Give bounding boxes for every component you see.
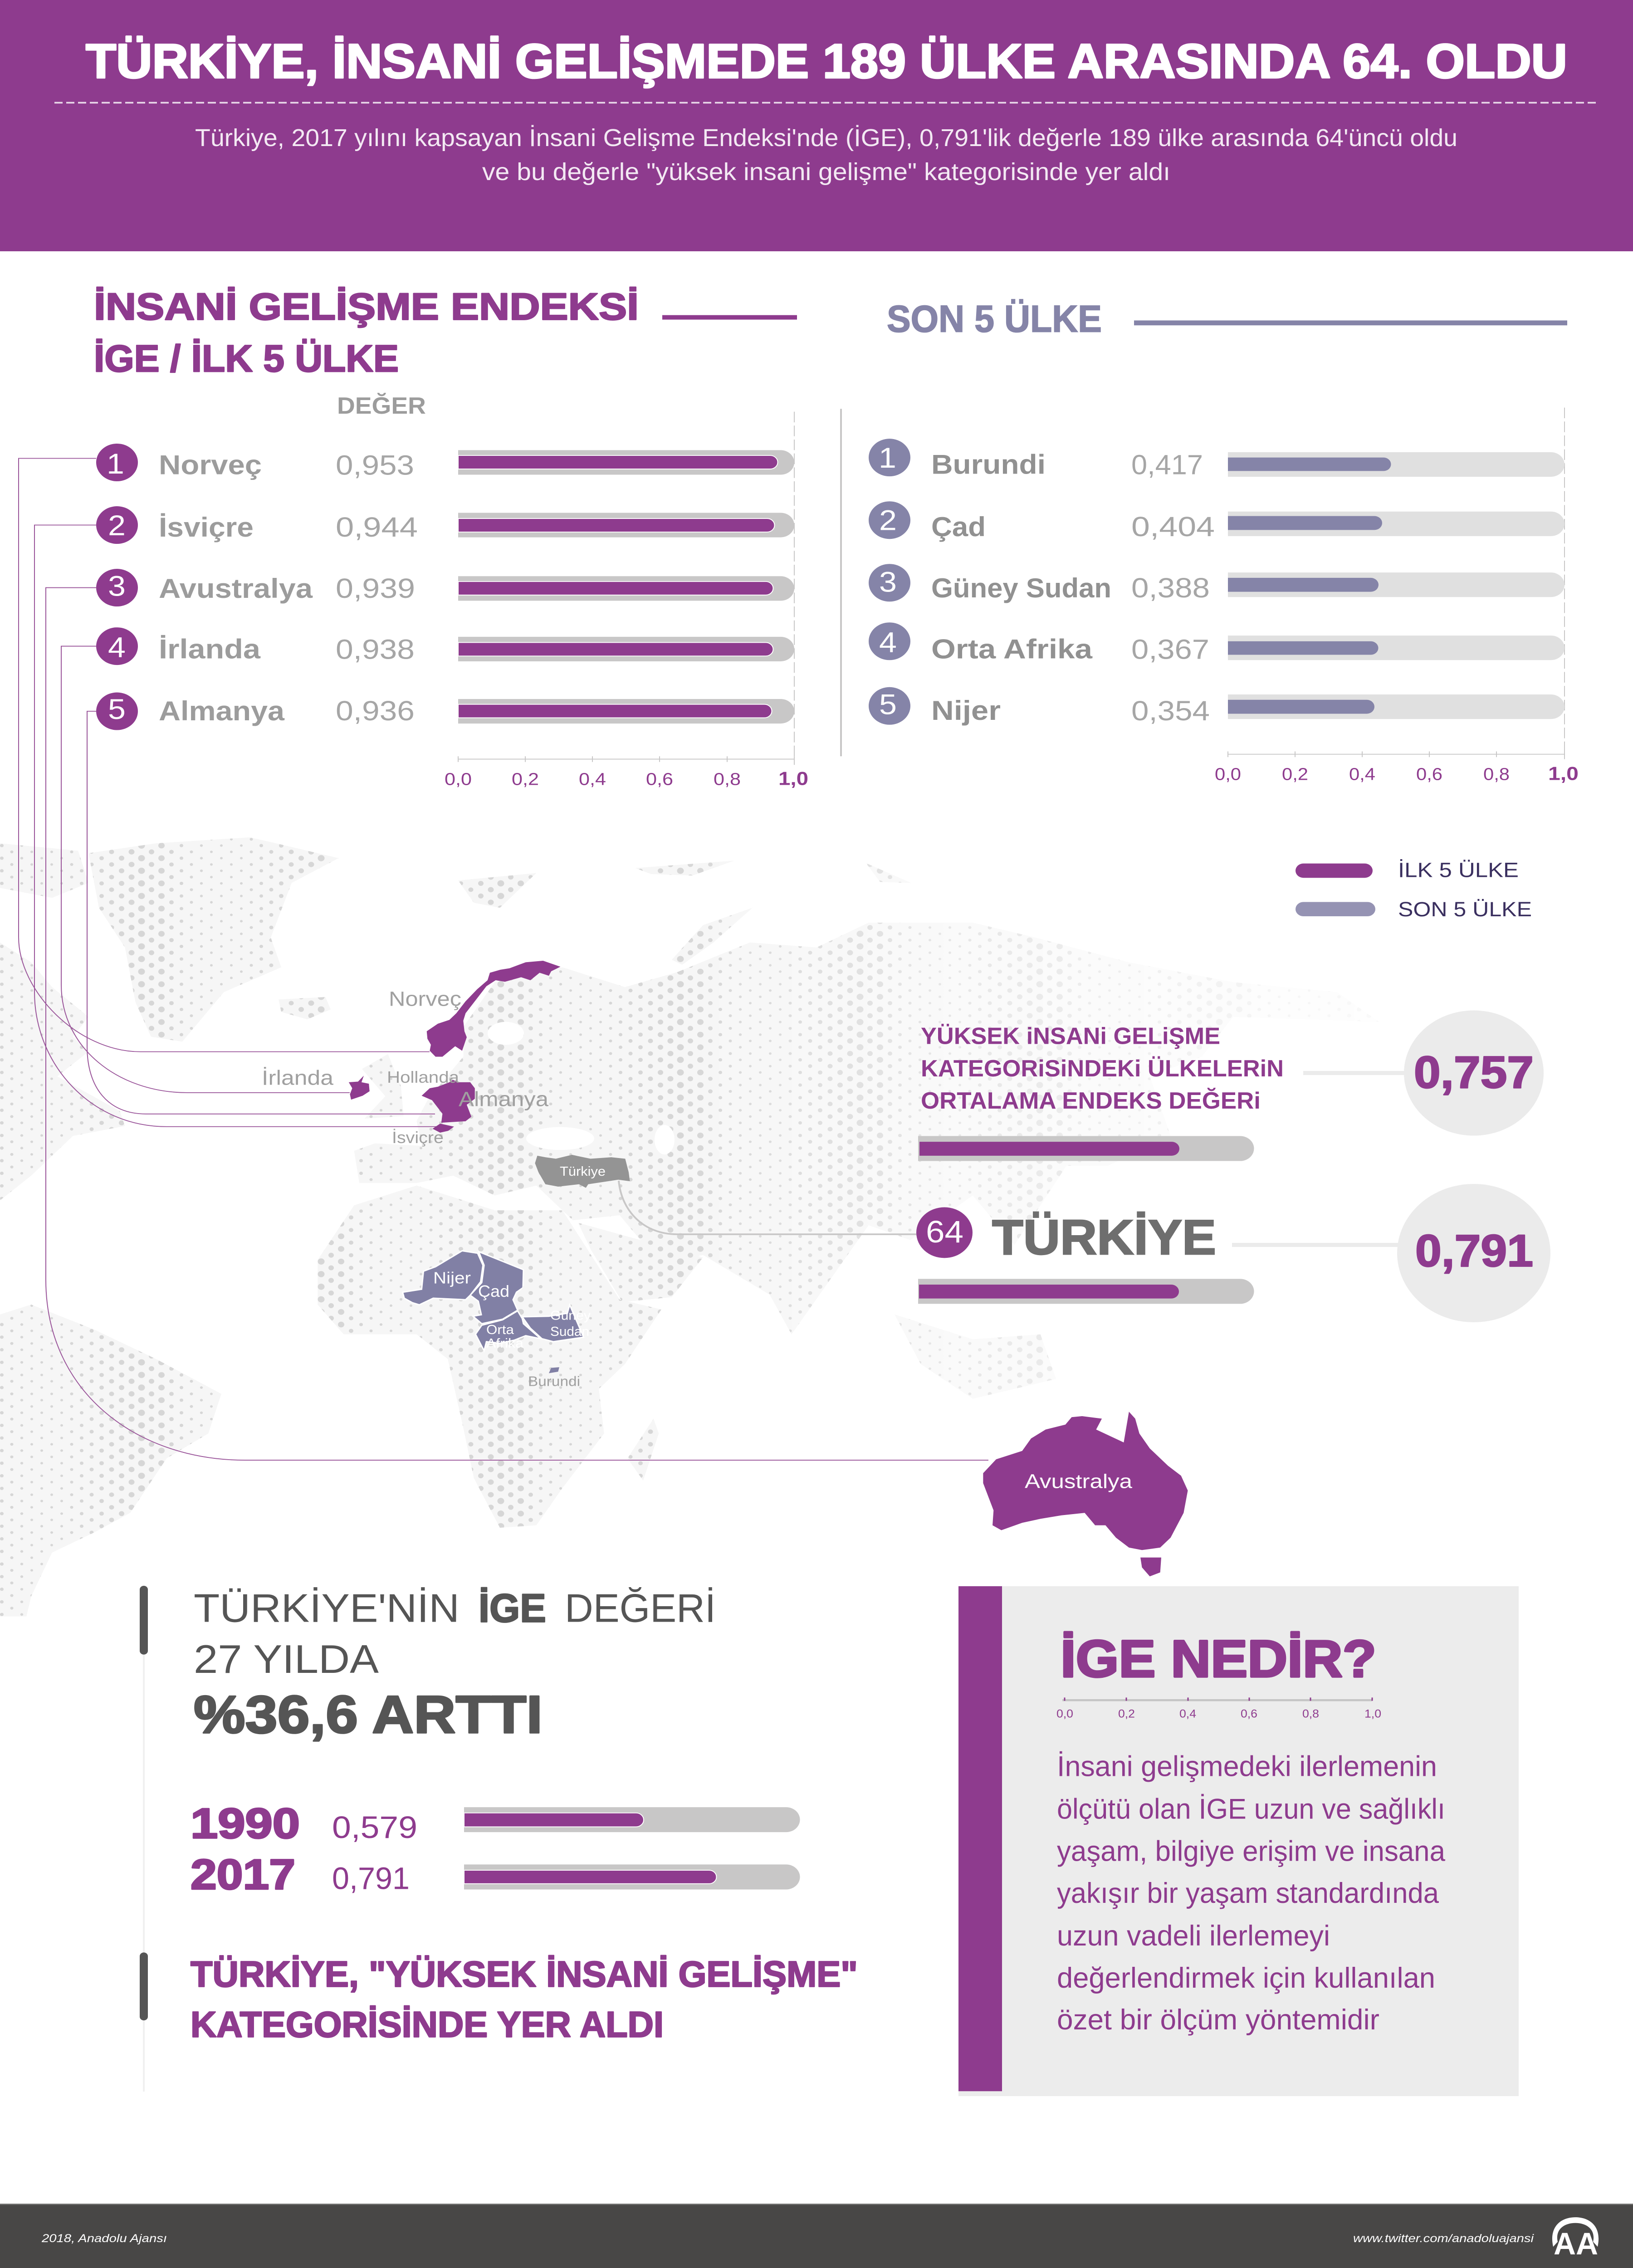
row: Niger: Nijer (931, 695, 1001, 726)
row: Central Africa: Orta Afrika (931, 634, 1093, 665)
column label: value: DEĞER (337, 392, 426, 419)
panel: Türkiye's HDI increase (140, 1586, 858, 2092)
axis: top five: 0,2 (512, 770, 539, 789)
row: South Sudan: Güney Sudan (931, 572, 1111, 603)
row: Germany: 5 (108, 694, 126, 725)
row: South Sudan (869, 564, 1565, 603)
heading text (194, 1586, 716, 1744)
row: Ireland (96, 627, 794, 665)
connector lines from top five to map (19, 458, 988, 1460)
callout: Türkiye rank and value: 0,791 (1415, 1226, 1533, 1276)
header band (0, 0, 1633, 251)
connector: Türkiye to rank (619, 1181, 916, 1234)
map labels: Çad (478, 1283, 509, 1301)
row: 2017: 0,791 (332, 1861, 410, 1896)
subtitle: ve bu değerle "yüksek insani gelişme" kategorisinde yer aldı (482, 158, 1170, 186)
row: 1990: 1990 (191, 1799, 300, 1847)
axis: bottom five: 0,4 (1349, 765, 1375, 784)
callout: high human development average: YÜKSEK iNSANi GELiŞME (921, 1022, 1220, 1049)
row: Australia: 0,939 (336, 572, 415, 604)
footer (0, 2204, 1633, 2268)
map labels: İrlanda (262, 1067, 334, 1090)
panel body text: ölçütü olan İGE uzun ve sağlıklı (1057, 1793, 1445, 1825)
axis: top five: 1,0 (778, 768, 808, 789)
conclusion text (191, 1954, 858, 2044)
callout: Türkiye rank and value: TÜRKİYE (992, 1211, 1216, 1265)
axis: bottom five: 0,8 (1483, 765, 1510, 784)
footer: www.twitter.com/anadoluajansi (1353, 2232, 1534, 2245)
row: Burundi: 1 (879, 442, 896, 474)
axis: bottom five (1215, 751, 1579, 784)
row: Switzerland: 2 (108, 510, 126, 542)
heading: bottom 5 (887, 298, 1567, 340)
panel body text (1057, 1751, 1446, 2036)
conclusion text: TÜRKİYE, "YÜKSEK İNSANİ GELİŞME" (191, 1954, 858, 1994)
row: Australia (96, 569, 794, 606)
row: Norway: 0,953 (336, 450, 414, 481)
panel body text: yakışır bir yaşam standardında (1057, 1877, 1439, 1909)
subtitle (195, 124, 1457, 186)
top five chart (96, 412, 808, 789)
panel body text: yaşam, bilgiye erişim ve insana (1057, 1835, 1446, 1867)
row: Niger (869, 687, 1565, 726)
subtitle: Türkiye, 2017 yılını kapsayan İnsani Gelişme Endeksi'nde (İGE), 0,791'lik değerle 189 ülke arasında 64'üncü oldu (195, 124, 1457, 152)
row: Ireland: 4 (108, 632, 126, 664)
row: 2017: 2017 (191, 1850, 295, 1898)
country shapes: bottom five (403, 1251, 583, 1373)
callout: high human development average: 0,757 (1414, 1047, 1534, 1098)
row: Chad: 0,404 (1131, 511, 1215, 542)
panel body text: uzun vadeli ilerlemeyi (1057, 1920, 1330, 1952)
callout: high human development average: ORTALAMA ENDEKS DEĞERi (921, 1087, 1261, 1114)
map labels: Sudan (550, 1324, 589, 1339)
row: Switzerland: İsviçre (159, 512, 254, 543)
callout: high human development average: KATEGORiSiNDEKi ÜLKELERiN (921, 1055, 1284, 1081)
axis: top five: 0,8 (714, 770, 741, 789)
row: Niger: 5 (879, 689, 897, 721)
panel scale: 0,4 (1179, 1707, 1196, 1720)
row: Central Africa (869, 622, 1565, 665)
axis: top five: 0,4 (579, 770, 606, 789)
world map background (0, 837, 1319, 1617)
row: Burundi (869, 439, 1565, 480)
row: Australia: 3 (108, 571, 126, 602)
map labels: Nijer (433, 1269, 471, 1287)
map labels: Burundi (528, 1374, 580, 1389)
row: Central Africa: 4 (879, 627, 897, 659)
heading text: 27 YILDA (194, 1637, 379, 1681)
map labels: Güney (550, 1308, 591, 1323)
row: Norway (96, 444, 794, 481)
callout: Türkiye rank and value (916, 1184, 1550, 1322)
row: South Sudan: 3 (879, 567, 897, 598)
heading text: DEĞERİ (565, 1586, 716, 1630)
map labels: Türkiye (560, 1164, 606, 1179)
map labels: Orta (486, 1323, 514, 1337)
row: Switzerland: 0,944 (336, 511, 418, 543)
axis: bottom five: 1,0 (1548, 763, 1579, 784)
footer: 2018, Anadolu Ajansı (41, 2232, 167, 2245)
row: Niger: 0,354 (1131, 695, 1210, 726)
legend: İLK 5 ÜLKE (1398, 859, 1519, 882)
panel scale: 0,0 (1056, 1707, 1073, 1720)
icon: Anadolu Agency logo: AA (1554, 2227, 1598, 2261)
heading: top 5: İGE / İLK 5 ÜLKE (94, 337, 399, 380)
row: Chad: 2 (879, 504, 897, 537)
heading text: %36,6 ARTTI (194, 1685, 543, 1744)
axis: bottom five: 0,2 (1282, 765, 1308, 784)
panel scale: 0,8 (1302, 1707, 1319, 1720)
row: Burundi: Burundi (931, 449, 1046, 480)
heading text: İGE (479, 1586, 546, 1630)
panel body text: özet bir ölçüm yöntemidir (1057, 2004, 1379, 2036)
axis: top five: 0,6 (646, 770, 673, 789)
map labels (262, 988, 1133, 1492)
panel body text: değerlendirmek için kullanılan (1057, 1962, 1435, 1994)
panel heading: İGE NEDİR? (1061, 1629, 1376, 1688)
legend (1296, 859, 1532, 921)
panel scale: 0,6 (1241, 1707, 1257, 1720)
axis: bottom five: 0,0 (1215, 765, 1241, 784)
panel: what is HDI (958, 1586, 1519, 2096)
axis: bottom five: 0,6 (1416, 765, 1442, 784)
row: Norway: Norveç (159, 450, 262, 480)
row: Chad (869, 501, 1565, 542)
row: Switzerland (96, 506, 794, 544)
panel scale: 1,0 (1364, 1707, 1381, 1720)
row: Central Africa: 0,367 (1131, 634, 1209, 665)
panel body text: İnsani gelişmedeki ilerlemenin (1057, 1751, 1437, 1783)
heading text: TÜRKİYE'NİN (194, 1586, 460, 1630)
callout: high human development average (918, 1011, 1544, 1161)
map labels: Hollanda (387, 1069, 460, 1087)
row: Norway: 1 (107, 448, 124, 480)
row: Ireland: İrlanda (159, 634, 261, 665)
panel scale (1056, 1697, 1381, 1720)
row: Germany: 0,936 (336, 695, 415, 726)
axis: top five (445, 756, 808, 789)
title: TÜRKİYE, İNSANİ GELİŞMEDE 189 ÜLKE ARASINDA 64. OLDU (86, 34, 1567, 88)
country shape: Türkiye (535, 1155, 630, 1188)
map labels: Norveç (389, 988, 461, 1011)
row: 1990 (191, 1799, 800, 1847)
axis: top five: 0,0 (445, 770, 472, 789)
row: Ireland: 0,938 (336, 634, 415, 665)
map labels: Afrika (486, 1336, 523, 1351)
row: 1990: 0,579 (332, 1810, 417, 1845)
country shape: Australia (983, 1412, 1188, 1576)
map labels: Almanya (459, 1088, 549, 1111)
row: Germany (96, 693, 794, 730)
row: Germany: Almanya (159, 695, 285, 726)
row: 2017 (191, 1850, 800, 1898)
callout: Türkiye rank and value: 64 (926, 1215, 963, 1249)
heading: bottom 5: SON 5 ÜLKE (887, 298, 1102, 340)
heading: top 5: İNSANİ GELİŞME ENDEKSİ (94, 285, 639, 328)
highlighted countries on map (262, 961, 1188, 1576)
row: Burundi: 0,417 (1131, 449, 1203, 480)
conclusion text: KATEGORİSİNDE YER ALDI (191, 2004, 664, 2044)
panel scale: 0,2 (1118, 1707, 1135, 1720)
map labels: İsviçre (392, 1129, 444, 1147)
map labels: Avustralya (1025, 1471, 1133, 1492)
legend: SON 5 ÜLKE (1398, 898, 1532, 921)
bottom five chart (840, 408, 1579, 784)
row: Chad: Çad (931, 511, 986, 542)
row: South Sudan: 0,388 (1131, 572, 1210, 603)
row: Australia: Avustralya (159, 573, 313, 604)
heading: top 5 (94, 285, 797, 380)
country shapes: top five (349, 961, 561, 1133)
